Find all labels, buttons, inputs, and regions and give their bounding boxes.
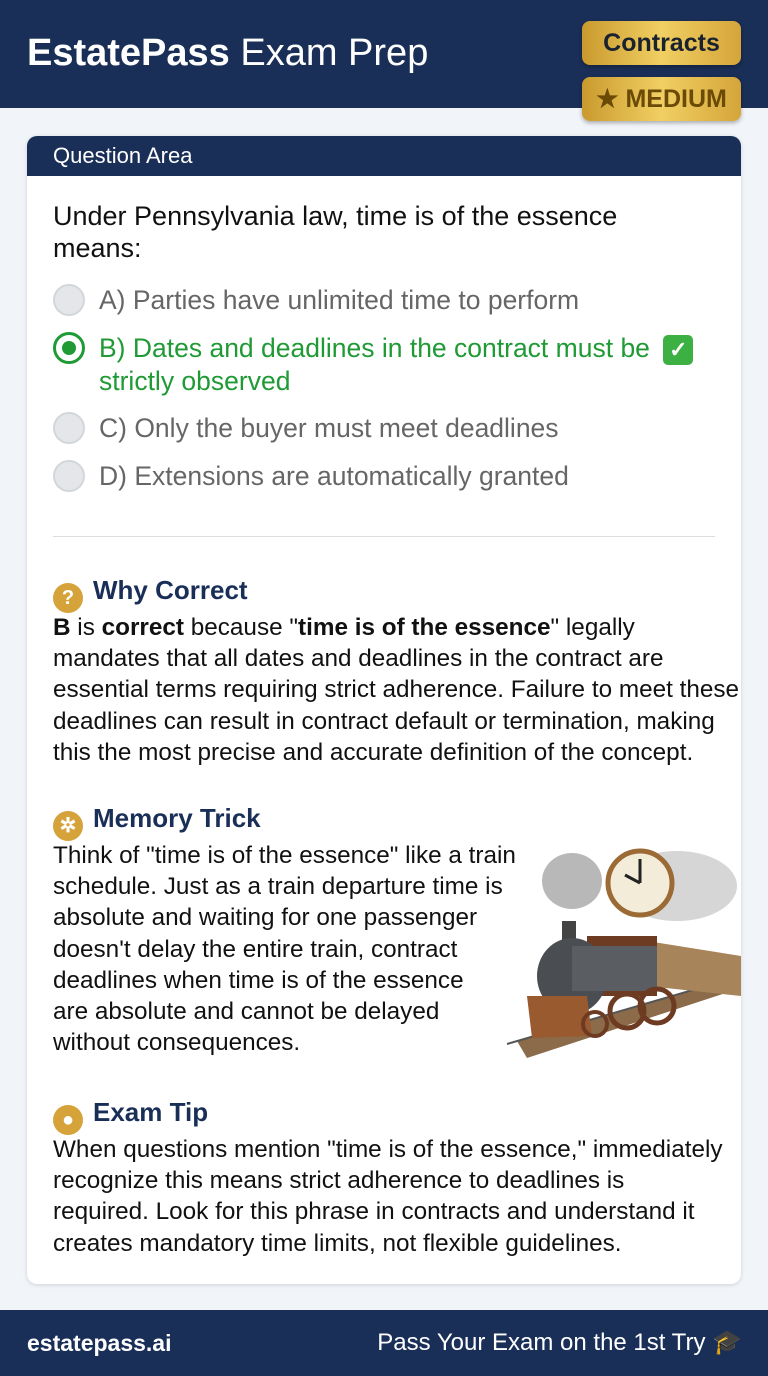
question card: A) Parties have unlimited time to perform — [99, 285, 579, 315]
text: memory trick: schedule. Just as a train departure time is — [53, 873, 503, 900]
text: why correct: mandates that all dates and deadlines in the contract are — [53, 645, 664, 672]
text: memory trick: absolute and waiting for one passenger — [53, 904, 477, 931]
question card: ✓ — [669, 337, 688, 362]
question card: C) Only the buyer must meet deadlines — [99, 413, 559, 443]
heading: why correct: Why Correct — [93, 575, 248, 605]
text: why correct — [53, 614, 739, 766]
badge: difficulty: ★ MEDIUM — [596, 85, 727, 113]
card header — [27, 136, 741, 176]
heading: memory trick: ✲ — [60, 815, 76, 837]
text: memory trick — [53, 842, 516, 1056]
text: memory trick: doesn't delay the entire train, contract — [53, 936, 457, 963]
option B correct — [53, 332, 693, 396]
question card — [27, 136, 741, 1284]
badge: category: Contracts — [603, 29, 720, 57]
heading: exam tip — [53, 1097, 208, 1135]
text: why correct: deadlines can result in contract default or termination, making — [53, 708, 715, 735]
text: why correct: B is correct because "time is of the essence" legally — [53, 614, 635, 641]
heading: why correct — [53, 575, 248, 613]
illustration: train with clock — [506, 848, 741, 1058]
text: exam tip: When questions mention "time is of the essence," immediately — [53, 1136, 723, 1163]
card header: Question Area — [53, 143, 192, 168]
heading: memory trick: Memory Trick — [93, 803, 261, 833]
text: why correct: this the most precise and accurate definition of the concept. — [53, 739, 693, 766]
text: exam tip: creates mandatory time limits, not flexible guidelines. — [53, 1230, 622, 1257]
question text — [53, 201, 617, 263]
option D — [53, 460, 569, 492]
text: exam tip: recognize this means strict adherence to deadlines is — [53, 1167, 624, 1194]
footer — [0, 1310, 768, 1376]
text: exam tip — [53, 1136, 723, 1257]
text: memory trick: deadlines when time is of the essence — [53, 967, 464, 994]
question card: B) Dates and deadlines in the contract must be — [99, 333, 650, 363]
question card: D) Extensions are automatically granted — [99, 461, 569, 491]
option C — [53, 412, 559, 444]
badge: difficulty — [582, 77, 741, 121]
question card: strictly observed — [99, 366, 290, 396]
heading: memory trick — [53, 803, 261, 841]
text: exam tip: required. Look for this phrase in contracts and understand it — [53, 1198, 695, 1225]
title: EstatePass Exam Prep — [27, 32, 428, 74]
header bar — [0, 0, 768, 108]
heading: why correct: ? — [62, 587, 74, 609]
text: why correct: essential terms requiring strict adherence. Failure to meet these — [53, 676, 739, 703]
footer slogan: Pass Your Exam on the 1st Try 🎓 — [377, 1329, 742, 1356]
heading: exam tip: ● — [62, 1109, 74, 1131]
heading: exam tip: Exam Tip — [93, 1097, 208, 1127]
question text: means: — [53, 233, 142, 263]
badge: category — [582, 21, 741, 65]
text: memory trick: without consequences. — [53, 1029, 300, 1056]
question text: Under Pennsylvania law, time is of the essence — [53, 201, 617, 231]
footer brand: estatepass.ai — [27, 1330, 171, 1356]
text: memory trick: are absolute and cannot be delayed — [53, 998, 439, 1025]
option A — [53, 284, 579, 316]
text: memory trick: Think of "time is of the essence" like a train — [53, 842, 516, 869]
